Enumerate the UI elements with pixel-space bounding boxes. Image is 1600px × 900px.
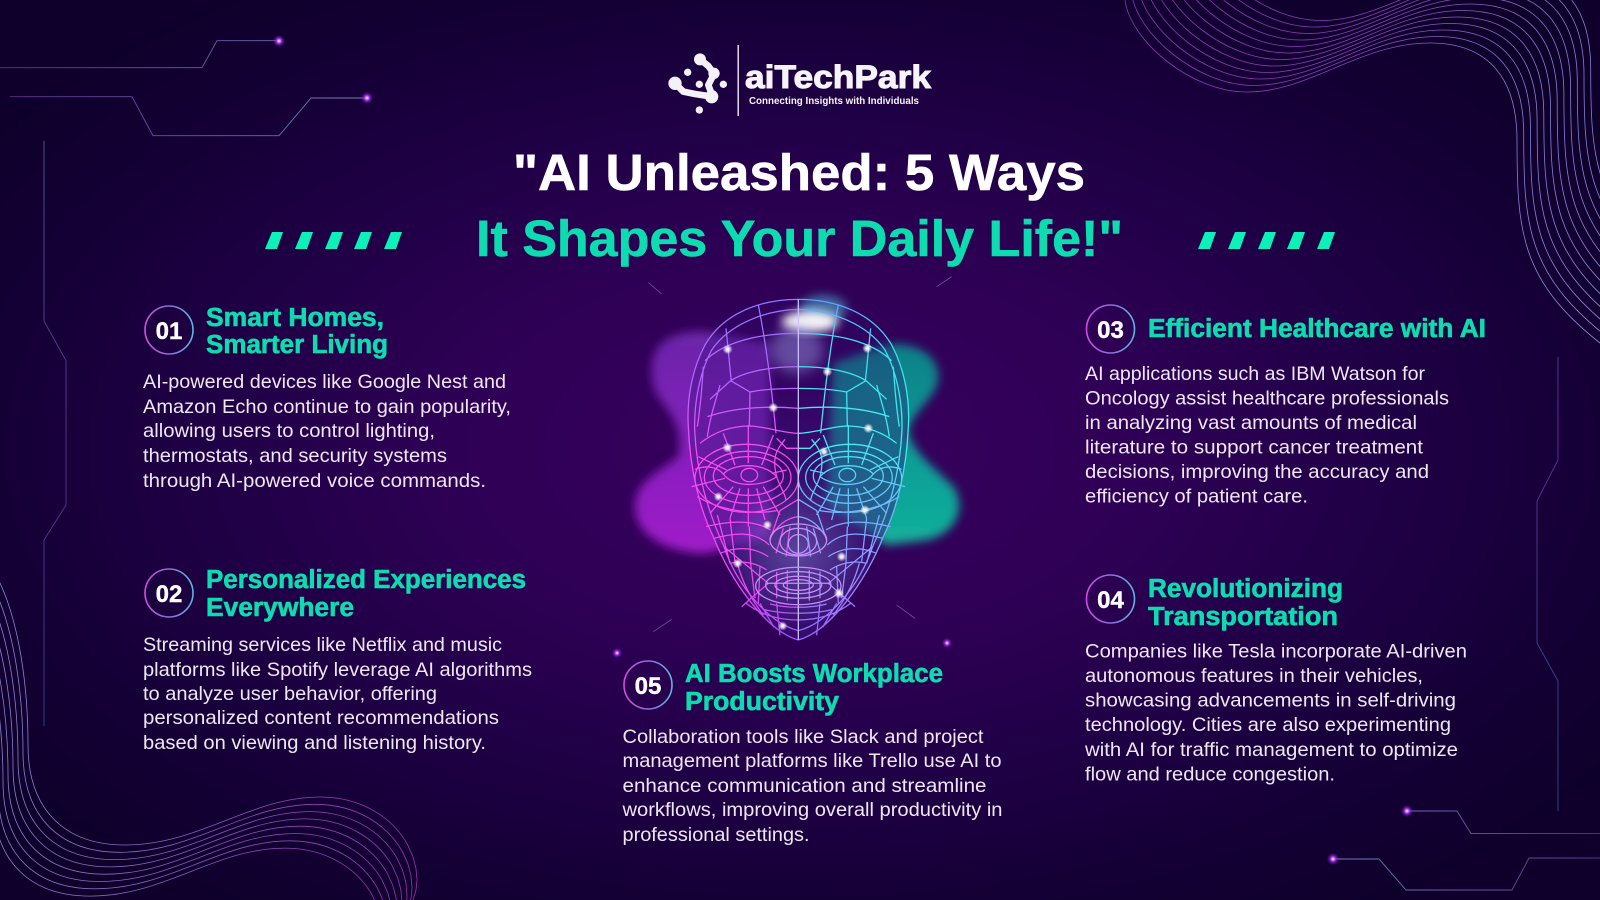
circuit lines: top left: [0, 35, 373, 726]
logo divider: [738, 45, 739, 116]
body 03: literature to support cancer treatment: [1085, 436, 1424, 458]
body 02: personalized content recommendations: [143, 707, 499, 729]
title: It Shapes Your Daily Life!": [476, 210, 1123, 267]
body 03: [1085, 363, 1449, 508]
body 03: efficiency of patient care.: [1085, 486, 1308, 508]
decorative dashes: right: [1198, 232, 1335, 249]
heading 05: [685, 660, 943, 716]
badge 01: 01: [156, 318, 182, 345]
wireframe mesh: [688, 299, 909, 640]
blob: teal glow: [827, 344, 959, 545]
badge 01: [145, 306, 193, 354]
body 04: flow and reduce congestion.: [1085, 764, 1335, 786]
glowing nodes: [714, 343, 873, 631]
logo tagline: Connecting Insights with Individuals: [749, 95, 919, 107]
blob: purple glow: [635, 331, 770, 553]
panel 01: smart homes: [143, 304, 511, 492]
body 05: workflows, improving overall productivity in: [621, 799, 1002, 821]
body 01: allowing users to control lighting,: [143, 420, 435, 442]
heading 02: Personalized Experiences: [206, 566, 526, 594]
icon: network logo mark: [668, 53, 727, 114]
body 04: autonomous features in their vehicles,: [1085, 665, 1423, 687]
title: "AI Unleashed: 5 Ways: [513, 144, 1085, 201]
body 04: Companies like Tesla incorporate AI-driven: [1085, 640, 1467, 662]
title: [476, 144, 1123, 267]
body 01: thermostats, and security systems: [143, 445, 447, 467]
body 03: Oncology assist healthcare professionals: [1085, 388, 1449, 410]
panel 03: efficient healthcare: [1085, 305, 1486, 508]
body 03: AI applications such as IBM Watson for: [1085, 363, 1426, 385]
heading 04: Revolutionizing: [1148, 575, 1343, 603]
body 03: decisions, improving the accuracy and: [1085, 461, 1429, 483]
body 03: in analyzing vast amounts of medical: [1085, 412, 1417, 434]
body 04: showcasing advancements in self-driving: [1085, 690, 1456, 712]
badge 03: 03: [1097, 317, 1124, 344]
body 01: [143, 371, 511, 492]
badge 05: 05: [635, 673, 661, 700]
body 05: enhance communication and streamline: [622, 775, 986, 797]
heading 04: [1148, 575, 1343, 631]
heading 01: Smarter Living: [206, 331, 388, 359]
decorative wave lines: top right: [1125, 0, 1600, 343]
panel 05: workplace productivity: [621, 660, 1002, 846]
body 05: management platforms like Trello use AI to: [622, 750, 1002, 772]
body 04: [1084, 640, 1467, 786]
badge 05: [624, 661, 672, 709]
logo: [668, 45, 931, 116]
body 02: platforms like Spotify leverage AI algorithms: [143, 659, 532, 681]
sparkle streaks: [648, 277, 952, 632]
body 02: to analyze user behavior, offering: [143, 683, 437, 705]
circuit lines: bottom right: [1327, 357, 1600, 890]
sparkle dots: [612, 638, 952, 658]
heading 03: Efficient Healthcare with AI: [1148, 315, 1486, 343]
decorative wave lines: bottom left: [0, 575, 417, 900]
heading 05: Productivity: [685, 688, 840, 716]
face fill: [688, 299, 909, 640]
heading 05: AI Boosts Workplace: [685, 660, 943, 688]
badge 04: [1086, 575, 1134, 623]
heading 02: Everywhere: [206, 594, 354, 622]
panel 04: revolutionizing transportation: [1084, 575, 1467, 786]
badge 02: 02: [156, 581, 182, 608]
body 01: Amazon Echo continue to gain popularity,: [143, 396, 511, 418]
body 02: based on viewing and listening history.: [143, 732, 486, 754]
body 05: [621, 726, 1002, 846]
body 02: [143, 634, 532, 754]
body 05: Collaboration tools like Slack and project: [622, 726, 984, 748]
body 04: with AI for traffic management to optimize: [1084, 739, 1458, 761]
heading 04: Transportation: [1148, 603, 1338, 631]
body 01: through AI-powered voice commands.: [143, 470, 486, 492]
decorative dashes: left: [265, 232, 402, 249]
central illustration: wireframe AI face: [635, 277, 959, 640]
body 02: Streaming services like Netflix and music: [143, 634, 502, 656]
body 05: professional settings.: [622, 824, 810, 846]
panel 02: personalized experiences: [143, 566, 532, 754]
heading 02: [206, 566, 526, 622]
highlight: top of head: [770, 295, 847, 373]
badge 04: 04: [1097, 587, 1124, 614]
heading 01: Smart Homes,: [206, 304, 384, 332]
badge 03: [1086, 305, 1134, 353]
body 04: technology. Cities are also experimenting: [1085, 714, 1451, 736]
body 01: AI-powered devices like Google Nest and: [143, 371, 506, 393]
heading 01: [206, 304, 388, 359]
badge 02: [145, 569, 193, 617]
logo wordmark: aiTechPark: [745, 59, 931, 95]
